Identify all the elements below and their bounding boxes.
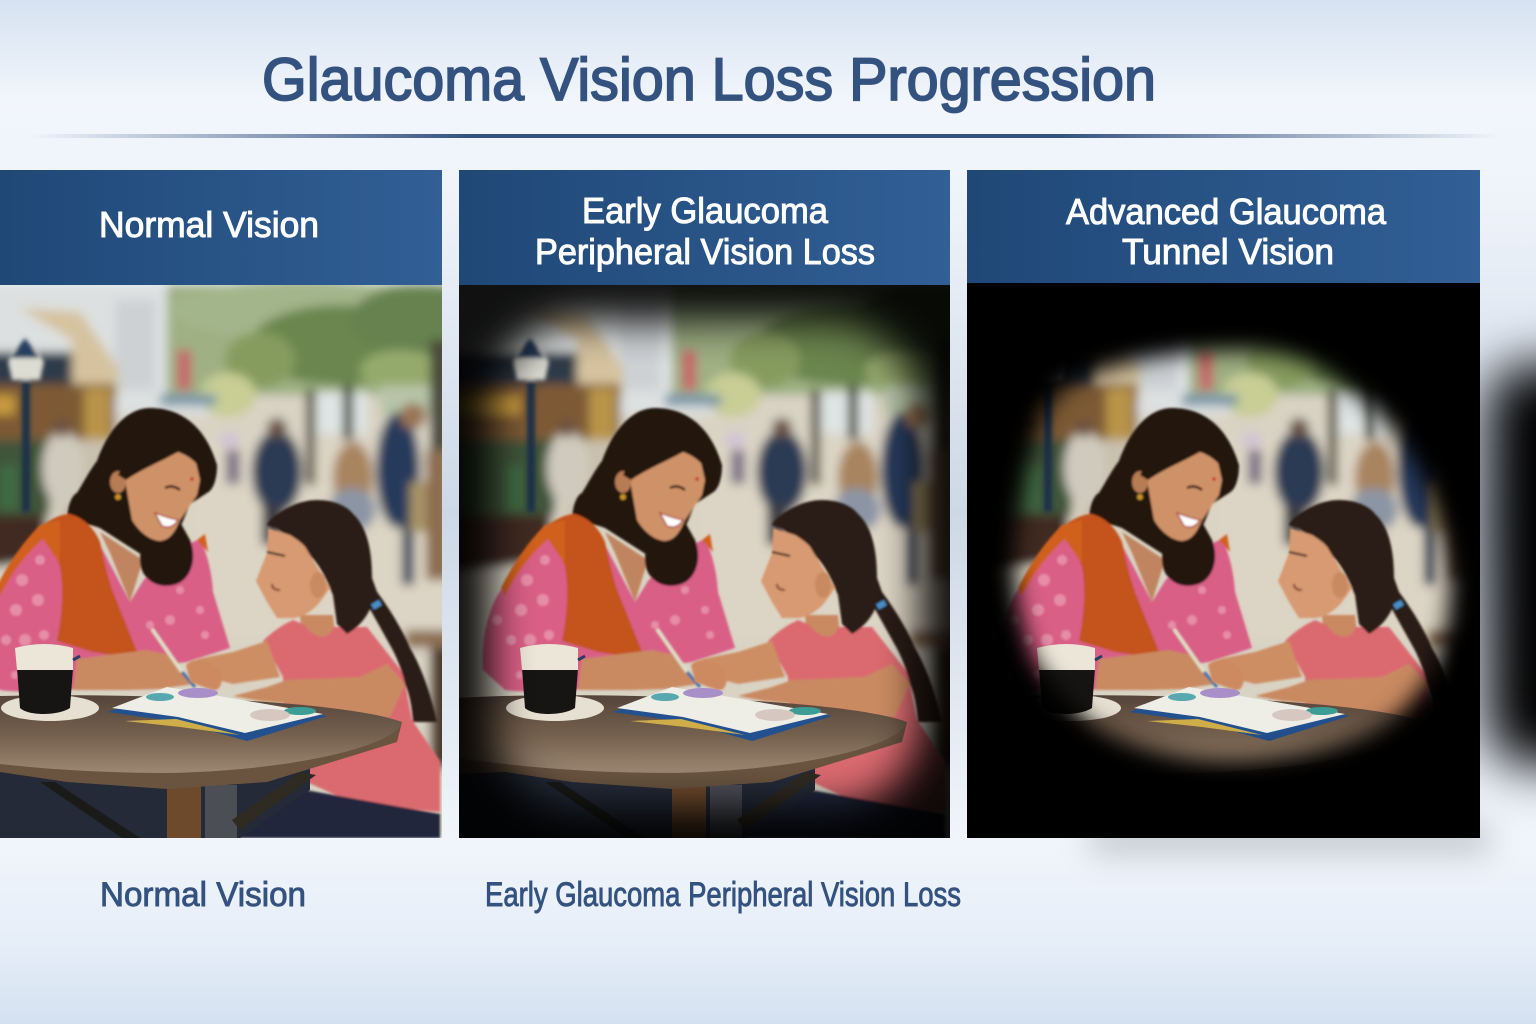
- black smudge beside advanced panel: [1090, 365, 1536, 852]
- caption: normal vision: Normal Vision: [100, 876, 306, 914]
- header: advanced glaucoma: Tunnel Vision: [1122, 231, 1334, 272]
- panel: advanced glaucoma: [967, 170, 1480, 838]
- header: early glaucoma: Early Glaucoma: [582, 190, 829, 231]
- scene photo: normal: [0, 285, 442, 838]
- scene photo: tunnel vision: [967, 283, 1480, 838]
- header: early glaucoma: Peripheral Vision Loss: [535, 231, 875, 272]
- header: normal vision: [0, 170, 442, 285]
- header: advanced glaucoma: Advanced Glaucoma: [1066, 191, 1387, 232]
- panel: normal vision: [0, 170, 442, 838]
- caption: early glaucoma: Early Glaucoma Peripheral Vision Loss: [485, 876, 961, 914]
- title: Glaucoma Vision Loss Progression: [262, 46, 1156, 113]
- header: normal vision: Normal Vision: [99, 204, 319, 245]
- header: early glaucoma: [459, 170, 950, 285]
- scene photo: early peripheral darkening: [459, 285, 950, 838]
- panel: early glaucoma: [459, 170, 950, 838]
- header: advanced glaucoma: [967, 170, 1480, 283]
